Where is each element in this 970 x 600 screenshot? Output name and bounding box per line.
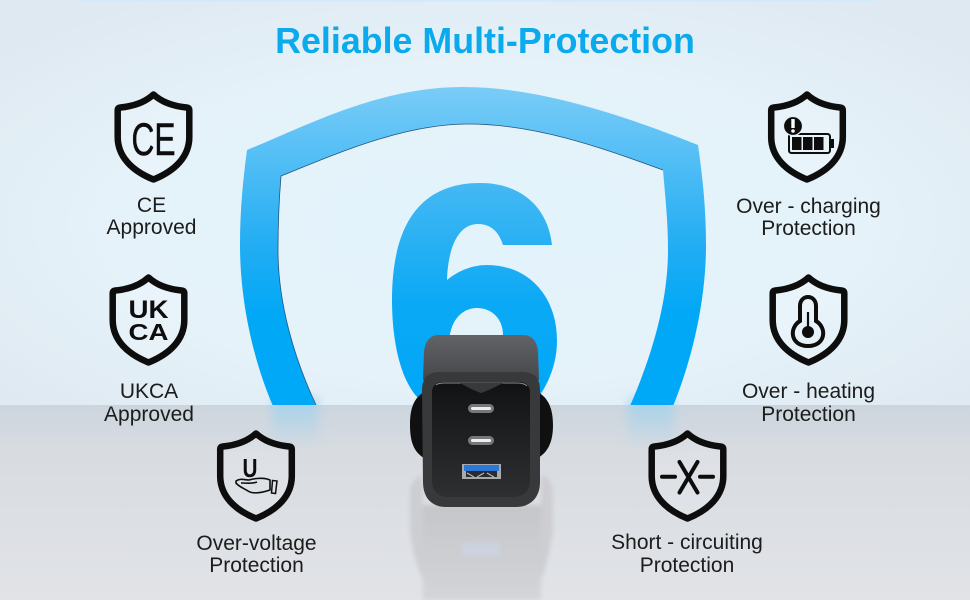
icon: CE shield: CE <box>132 114 176 165</box>
charger <box>410 335 553 507</box>
charger top block <box>423 335 539 380</box>
icon: over-voltage shield: U <box>242 453 258 483</box>
big numeral 6 <box>392 183 557 397</box>
charger reflection <box>410 475 553 600</box>
inner shield dark edge <box>278 124 663 405</box>
title: Reliable Multi-Protection <box>275 21 695 61</box>
icon: UKCA shield <box>113 278 184 362</box>
side pins <box>410 392 553 458</box>
icon: CE shield <box>118 94 189 180</box>
icon: over-voltage shield <box>220 434 292 518</box>
charger front body <box>422 372 540 507</box>
label: Over-voltage Protection: Protection <box>209 554 304 577</box>
label: UKCA Approved <box>104 380 194 426</box>
label: UKCA Approved: UKCA <box>120 380 178 403</box>
USB-C port 2 <box>468 436 494 445</box>
icon: over-heating shield <box>773 278 844 362</box>
charger face <box>432 382 530 497</box>
label: Short-circuiting Protection: Protection <box>640 554 734 576</box>
background wall <box>0 0 970 406</box>
icon: over-charging shield <box>771 94 843 180</box>
big blue shield outline <box>240 87 706 406</box>
label: UKCA Approved: Approved <box>104 402 194 426</box>
shield reflection on floor <box>272 398 674 448</box>
label: Over-charging Protection <box>736 194 881 240</box>
top highlight line <box>77 0 873 2</box>
label: Over-voltage Protection: Over-voltage <box>196 532 317 554</box>
label: CE Approved <box>106 194 196 239</box>
label: CE Approved: CE <box>137 194 166 216</box>
label: Over-heating Protection <box>742 380 875 426</box>
label: Short-circuiting Protection <box>611 531 763 576</box>
USB-A port <box>462 464 501 479</box>
icon: UKCA shield: UK <box>128 296 168 324</box>
USB-C port 1 <box>468 404 494 413</box>
label: Over-heating Protection: Protection <box>761 402 856 426</box>
label: Over-heating Protection: Over - heating <box>742 380 875 403</box>
label: Over-voltage Protection <box>196 532 317 577</box>
label: Over-charging Protection: Over - charging <box>736 194 881 218</box>
label: Over-charging Protection: Protection <box>761 217 856 240</box>
label: CE Approved: Approved <box>107 216 196 239</box>
label: Short-circuiting Protection: Short - circuiting <box>611 531 763 554</box>
icon: UKCA shield: CA <box>128 319 168 345</box>
floor <box>0 405 970 600</box>
icon: short-circuit shield <box>652 434 723 518</box>
